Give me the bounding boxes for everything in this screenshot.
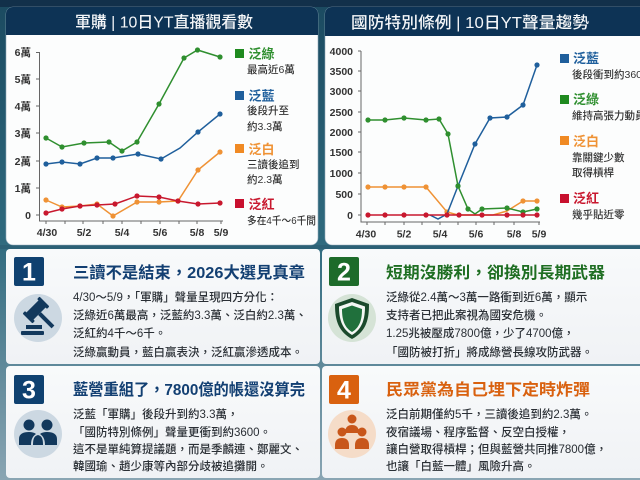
line: 泛白 軍購 bbox=[43, 149, 223, 219]
card 3: 藍營重組了 bbox=[6, 366, 320, 478]
legend: 國防: 泛紅 bbox=[573, 191, 599, 206]
legend: 軍購 bbox=[235, 46, 316, 227]
chart axes and labels: 軍購: 5/2 bbox=[77, 227, 91, 239]
icon: shield bbox=[328, 294, 376, 342]
chart axes and labels: 國防: 5/8 bbox=[507, 228, 521, 240]
chart axes and labels: 軍購: 5/6 bbox=[153, 227, 167, 239]
body text 2: 1.25兆被壓成7800億，少了4700億， bbox=[386, 326, 575, 340]
title 2: 短期沒勝利，卻換別長期武器 bbox=[386, 263, 605, 282]
chart axes and labels: 軍購: 0 bbox=[25, 210, 31, 222]
chart axes and labels: 國防: 500 bbox=[335, 189, 353, 201]
chart axes and labels: 國防: 0 bbox=[347, 210, 353, 222]
number badge 1 bbox=[14, 257, 44, 286]
chart axes and labels: 國防: 4000 bbox=[330, 46, 353, 58]
chart axes and labels: 國防: 1000 bbox=[330, 168, 353, 180]
chart axes and labels: 國防: 3500 bbox=[330, 66, 353, 78]
legend: 軍購: 泛藍 bbox=[248, 88, 275, 104]
number badge 4 bbox=[329, 375, 359, 404]
panel: 國防特別條例 YT 聲量趨勢 bbox=[325, 7, 640, 245]
line: 泛綠 軍購 bbox=[43, 47, 223, 154]
body text 1: 4/30～5/9，「軍購」聲量呈現四方分化： bbox=[73, 290, 278, 304]
title 4: 民眾黨為自己埋下定時炸彈 bbox=[386, 380, 590, 399]
chart axes and labels: 軍購: 3萬 bbox=[15, 127, 31, 140]
body text 2: 泛綠從2.4萬～3萬一路衝到近6萬，顯示 bbox=[386, 290, 588, 304]
legend: 國防: 泛綠 bbox=[573, 92, 599, 107]
body text 1: 泛紅約4千～6千。 bbox=[73, 326, 166, 340]
number badge 3: 3 bbox=[22, 376, 36, 404]
icon: gavel bbox=[14, 294, 62, 342]
body text 4: 也讓「白藍一體」風險升高。 bbox=[386, 459, 536, 473]
chart axes and labels: 國防: 5/9 bbox=[532, 228, 546, 240]
header: 軍購: 軍購 | 10日YT直播觀看數 bbox=[75, 14, 253, 32]
header: 國防特別條例 bbox=[325, 7, 640, 36]
body text 1: 泛綠近6萬最高，泛藍約3.3萬、泛白約2.3萬、 bbox=[73, 308, 307, 322]
card 4: 民眾黨 bbox=[322, 366, 640, 478]
chart axes and labels: 國防: 3000 bbox=[330, 86, 353, 98]
legend: 軍購: 最高近6萬 bbox=[247, 63, 295, 76]
legend: 軍購: 泛紅 bbox=[248, 197, 275, 212]
body text 3: 「國防特別條例」聲量更衝到約3600。 bbox=[73, 425, 271, 439]
number badge 3 bbox=[14, 375, 44, 404]
line: 泛藍 軍購 bbox=[43, 111, 223, 167]
chart axes and labels: 軍購: 5/9 bbox=[214, 227, 228, 239]
legend: 軍購: 泛白 bbox=[248, 142, 275, 157]
chart axes and labels: 軍購: 4萬 bbox=[15, 100, 31, 113]
body text 3: 這不是單純算提議題，而是季麟連、鄭麗文、 bbox=[73, 442, 303, 456]
legend: 軍購: 約3.3萬 bbox=[247, 120, 283, 133]
chart axes and labels: 國防: 4/30 bbox=[356, 228, 376, 240]
chart axes and labels: 國防: 2500 bbox=[330, 107, 353, 119]
body text 3: 泛藍「軍購」後段升到約3.3萬， bbox=[73, 407, 238, 421]
chart axes and labels: 軍購: 6萬 bbox=[15, 46, 31, 59]
chart axes and labels: 軍購: 5/4 bbox=[115, 227, 129, 239]
panel: 軍購 YT 直播觀看數 bbox=[6, 7, 318, 245]
body text 3 bbox=[73, 407, 303, 473]
legend: 軍購: 後段升至 bbox=[247, 104, 289, 117]
legend: 軍購: 三讀後追到 bbox=[247, 158, 300, 171]
card 2: 短期沒勝利 bbox=[322, 249, 640, 364]
chart axes and labels: 國防: 2000 bbox=[330, 127, 353, 139]
title 1: 三讀不是結束，2026大選見真章 bbox=[73, 263, 305, 282]
chart axes and labels: 國防 bbox=[330, 46, 546, 240]
icon: people at table bbox=[328, 410, 376, 458]
body text 2 bbox=[386, 290, 593, 359]
chart axes and labels: 軍購: 1萬 bbox=[15, 182, 31, 195]
icon: people bbox=[14, 410, 62, 458]
line: 泛紅 國防 bbox=[365, 212, 540, 218]
legend: 國防: 泛白 bbox=[573, 134, 599, 149]
body text 4: 讓白營取得槓桿；但與藍營共同推7800億， bbox=[386, 442, 607, 456]
chart axes and labels: 軍購: 5萬 bbox=[15, 73, 31, 86]
body text 3: 韓國瑜、趙少康等內部分歧被追攤開。 bbox=[73, 459, 268, 473]
legend: 國防: 幾乎貼近零 bbox=[572, 208, 625, 221]
line: 泛紅 軍購 bbox=[43, 193, 223, 216]
card 1: 三讀不是結束 bbox=[6, 249, 320, 364]
number badge 4: 4 bbox=[337, 376, 351, 404]
line: 泛藍 國防 bbox=[430, 62, 540, 219]
number badge 2 bbox=[329, 257, 359, 286]
body text 4: 夜宿議場、程序監督、反空白授權， bbox=[386, 425, 570, 439]
chart axes and labels: 國防: 5/2 bbox=[397, 228, 411, 240]
chart axes and labels: 軍購: 5/8 bbox=[190, 227, 204, 239]
header: 軍購 bbox=[6, 7, 318, 35]
chart axes and labels: 國防: 5/4 bbox=[433, 228, 447, 240]
number badge 2: 2 bbox=[337, 258, 351, 286]
line: 泛綠 國防 bbox=[365, 115, 540, 215]
body text 1 bbox=[73, 290, 307, 359]
legend: 國防: 泛藍 bbox=[573, 51, 599, 66]
legend: 國防: 取得槓桿 bbox=[572, 166, 614, 179]
body text 1: 泛綠贏動員，藍白贏表決，泛紅贏滲透成本。 bbox=[73, 345, 303, 359]
chart axes and labels: 軍購 bbox=[15, 46, 228, 239]
chart axes and labels: 軍購: 4/30 bbox=[37, 227, 57, 239]
legend: 國防: 靠關鍵少數 bbox=[572, 151, 625, 164]
body text 4 bbox=[386, 407, 607, 473]
title 3: 藍營重組了，7800億的帳還沒算完 bbox=[73, 380, 305, 399]
number badge 1: 1 bbox=[22, 258, 36, 286]
chart axes and labels: 國防: 5/6 bbox=[469, 228, 483, 240]
line: 泛白 國防 bbox=[365, 184, 540, 215]
legend: 軍購: 多在4千～6千間 bbox=[247, 214, 316, 227]
body text 2: 「國防被打折」將成綠營長線攻防武器。 bbox=[386, 345, 593, 359]
legend: 軍購: 泛綠 bbox=[248, 46, 275, 62]
legend: 軍購: 約2.3萬 bbox=[247, 173, 283, 186]
chart axes and labels: 軍購: 2萬 bbox=[15, 155, 31, 168]
legend: 國防 bbox=[560, 51, 640, 221]
body text 2: 支持者已把此案視為國安危機。 bbox=[386, 308, 547, 322]
header: 國防特別條例: 國防特別條例 | 10日YT聲量趨勢 bbox=[351, 14, 589, 32]
body text 4: 泛白前期僅約5千，三讀後追到約2.3萬。 bbox=[386, 407, 592, 421]
chart axes and labels: 國防: 1500 bbox=[330, 147, 353, 159]
